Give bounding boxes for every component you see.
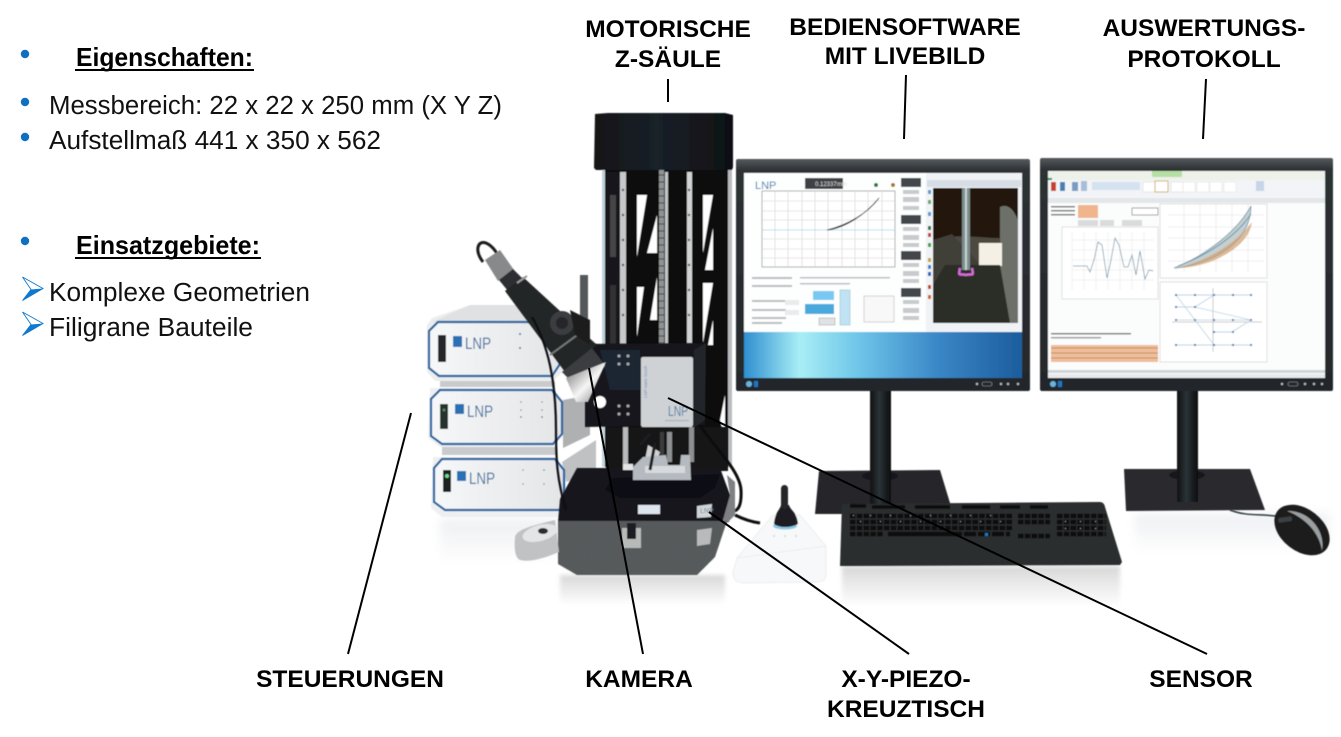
monitor: evaluation report — [1040, 158, 1333, 511]
camera cable — [478, 242, 500, 262]
icon: keyboard — [840, 502, 1122, 566]
list item: Komplexe Geometrien: Komplexe Geometrien — [49, 279, 310, 307]
column head block — [594, 113, 733, 170]
label: xy piezo stage: KREUZTISCH — [827, 696, 985, 723]
label: controllers: STEUERUNGEN — [256, 666, 444, 693]
force displacement chart — [762, 191, 895, 267]
arrow: camera — [589, 368, 643, 654]
software screen: 0.12337mm — [815, 182, 847, 188]
camera mount bar — [580, 275, 588, 350]
scatter chart — [1160, 282, 1267, 362]
controller unit 3: LNP — [469, 469, 495, 488]
unit spacer — [442, 447, 557, 455]
granite base — [558, 521, 727, 575]
label: sensor: SENSOR — [1149, 666, 1253, 693]
label: software: BEDIENSOFTWARE — [789, 14, 1021, 41]
monitor stand — [815, 390, 952, 514]
parameter fields — [752, 277, 890, 324]
cable bundle — [700, 425, 760, 523]
software screen — [744, 173, 1022, 378]
arrow: controllers — [348, 413, 411, 654]
icon: mouse with cable — [1230, 494, 1339, 566]
arrow: software — [904, 75, 906, 139]
motorised Z column — [594, 113, 733, 467]
line chart — [1062, 227, 1158, 299]
monitor bezel — [736, 159, 1030, 391]
monitor stand — [1124, 390, 1265, 511]
bracket plate — [585, 343, 706, 428]
floor reflections — [440, 514, 1330, 606]
text: Messbereich: Messbereich: 22 x 22 x 250 mm (X Y Z) — [49, 92, 502, 120]
spindle — [606, 427, 728, 471]
monitor bezel — [1040, 158, 1333, 391]
tension knob — [515, 520, 559, 561]
camera clamp knob — [550, 311, 574, 335]
unit spacer — [440, 381, 555, 387]
label: motorised Z column: MOTORISCHE — [585, 16, 751, 43]
camera — [478, 242, 606, 510]
heading: Einsatzgebiete: Einsatzgebiete: — [76, 230, 260, 260]
sensor housing: LNP — [668, 403, 688, 420]
heading: Eigenschaften: Eigenschaften: — [76, 42, 253, 72]
sheet tabs — [1048, 370, 1325, 373]
notes table — [1051, 333, 1158, 362]
cable to controller — [532, 317, 566, 510]
label: motorised Z column: Z-SÄULE — [615, 46, 721, 73]
sensor housing — [641, 357, 693, 427]
hysteresis curves chart — [1160, 204, 1267, 278]
text: Aufstellmass: Aufstellmaß 441 x 350 x 562 — [49, 127, 381, 155]
controller unit 2: LNP — [467, 402, 493, 421]
lens ring — [562, 348, 606, 388]
panel: properties and application areas — [21, 42, 502, 342]
arrow: xy piezo stage — [709, 512, 909, 654]
list item: Filigrane Bauteile: Filigrane Bauteile — [49, 314, 253, 342]
stage top plate: LNP — [700, 508, 714, 515]
live image window — [926, 173, 1022, 332]
label: camera: KAMERA — [585, 666, 693, 693]
label: software: MIT LIVEBILD — [825, 43, 985, 70]
spreadsheet screen — [1048, 171, 1325, 378]
software screen: LNP — [755, 180, 776, 192]
column frame — [602, 170, 732, 467]
stage top plate — [558, 468, 733, 522]
nano touch sensor carriage — [515, 343, 760, 575]
arrow: sensor — [668, 398, 1207, 654]
label: report: AUSWERTUNGS- — [1103, 15, 1305, 42]
sensor readouts — [901, 178, 921, 320]
camera body — [485, 250, 514, 281]
controller unit 1: LNP — [465, 334, 491, 353]
controller unit 3 — [431, 440, 596, 517]
controller unit 2 — [428, 388, 590, 448]
label: xy piezo stage: X-Y-PIEZO- — [841, 666, 971, 693]
label: report: PROTOKOLL — [1127, 46, 1281, 73]
monitor controls — [1050, 381, 1323, 387]
sample holder — [623, 434, 691, 480]
icon: joystick controller — [733, 485, 826, 583]
monitor: operating software with live image — [736, 159, 1030, 514]
sensor housing: LNP nano touch — [643, 365, 648, 398]
monitor controls — [746, 381, 1019, 387]
arrow: report — [1203, 79, 1206, 139]
leader lines — [348, 75, 1207, 654]
controllers stack — [427, 305, 596, 517]
controller unit 1 — [427, 305, 565, 381]
arrow: Z column — [667, 79, 669, 102]
orange header cells — [1051, 205, 1158, 226]
